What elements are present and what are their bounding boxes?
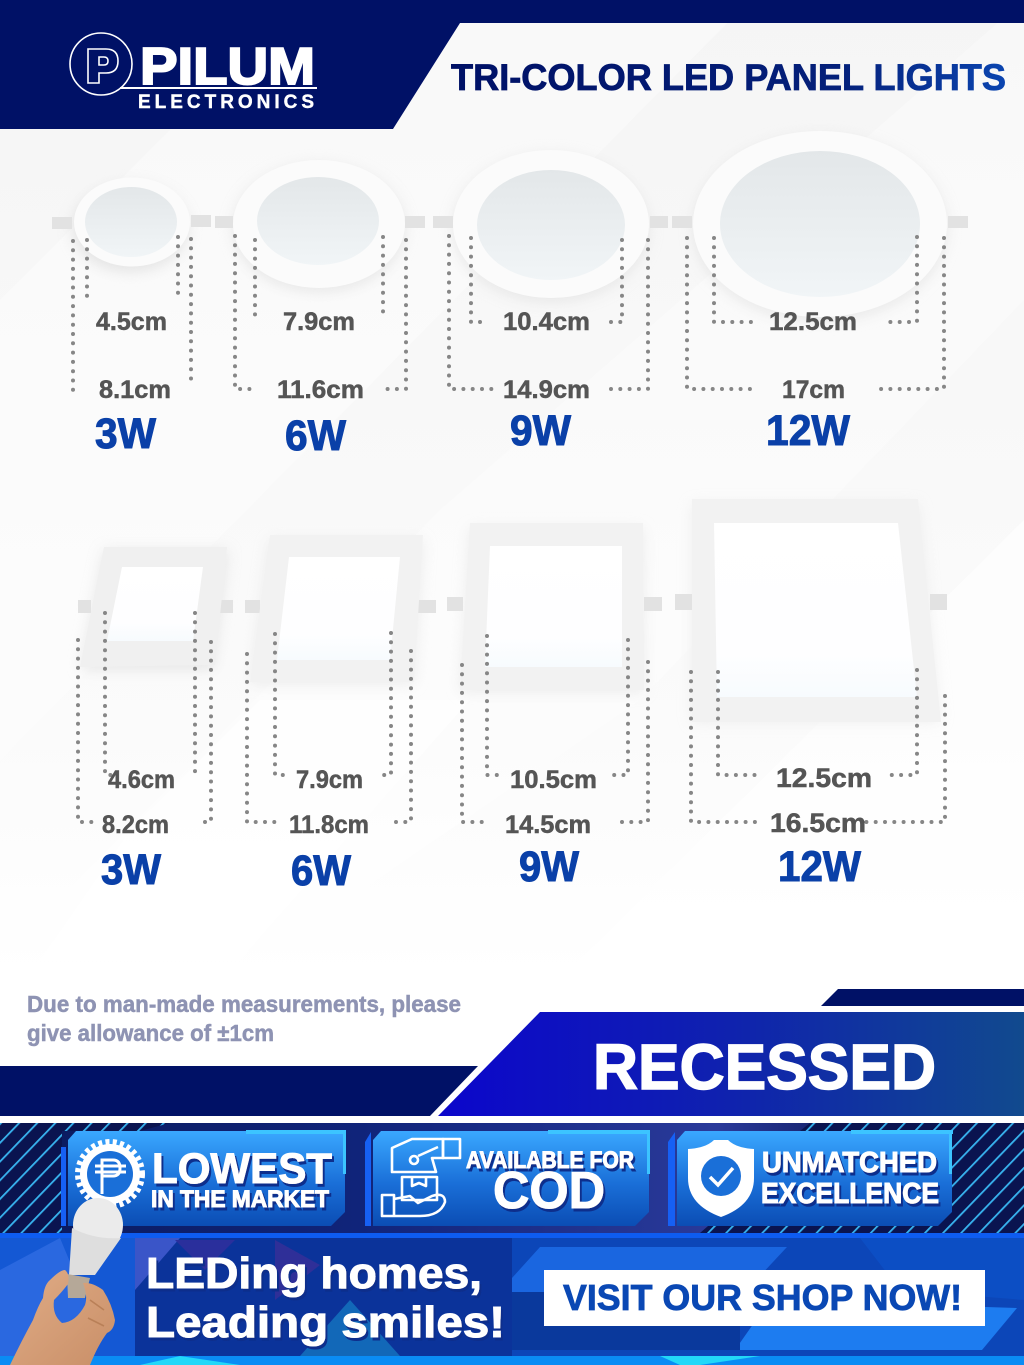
measurement disclaimer note: give allowance of ±1cm — [27, 1020, 274, 1046]
dimension labels: round lights: 4.5cm — [96, 308, 167, 336]
dimension labels: square lights: 8.2cm — [102, 811, 169, 839]
badge: lowest in the market: LOWEST — [152, 1145, 332, 1193]
dimension labels: square lights — [102, 763, 872, 839]
wattage labels: square lights: 9W — [519, 843, 579, 891]
dotted dimension guides: square lights — [78, 613, 945, 822]
slogan text — [146, 1249, 505, 1347]
call to action button: VISIT OUR SHOP NOW! — [563, 1277, 962, 1318]
panel: square recessed lights — [78, 499, 947, 722]
dimension labels: square lights: 16.5cm — [770, 808, 866, 838]
logo: Pilum Electronics: ELECTRONICS — [138, 92, 314, 113]
wattage labels: round lights: 9W — [510, 407, 571, 455]
banner: recessed — [438, 1012, 1024, 1116]
badge: unmatched excellence — [668, 1130, 953, 1226]
slogan text: LEDing homes, — [146, 1249, 482, 1298]
dimension labels: round lights: 10.4cm — [503, 308, 590, 336]
light: round 12W — [672, 131, 968, 321]
dimension labels: round lights: 17cm — [782, 376, 845, 404]
panel: round recessed lights — [52, 131, 968, 321]
measurement disclaimer note: Due to man-made measurements, please — [27, 991, 461, 1017]
logo: Pilum Electronics — [70, 33, 317, 113]
light: square 9W — [447, 523, 662, 692]
call to action button — [544, 1270, 985, 1326]
panel: benefit badges strip — [0, 1123, 1024, 1238]
dimension labels: square lights: 10.5cm — [510, 766, 597, 794]
dimension labels: round lights — [96, 308, 857, 404]
white separator — [0, 1116, 1024, 1123]
dimension labels: square lights: 11.8cm — [289, 811, 369, 839]
wattage labels: round lights — [95, 407, 850, 460]
measurement disclaimer note — [27, 991, 461, 1046]
wattage labels: round lights: 12W — [766, 407, 850, 455]
dimension labels: square lights: 12.5cm — [776, 763, 872, 793]
wattage labels: square lights — [101, 843, 861, 895]
wattage labels: square lights: 12W — [778, 843, 861, 891]
navy strip left — [0, 1066, 478, 1116]
light: square 6W — [245, 535, 436, 684]
wattage labels: round lights: 6W — [285, 412, 346, 460]
slogan text: Leading smiles! — [146, 1298, 505, 1347]
dimension labels: square lights: 7.9cm — [296, 766, 363, 794]
light: round 3W — [52, 178, 211, 272]
icon: cash on delivery hands — [382, 1139, 460, 1216]
light: round 9W — [433, 150, 668, 302]
badge: unmatched excellence: UNMATCHED — [762, 1147, 937, 1179]
title: TRI-COLOR LED PANEL LIGHTS — [451, 57, 1006, 98]
dimension labels: square lights: 14.5cm — [505, 811, 591, 839]
light: square 3W — [78, 547, 233, 670]
header band with logo — [0, 0, 1024, 129]
badge: available for cod — [365, 1130, 650, 1226]
dimension labels: round lights: 14.9cm — [503, 376, 590, 404]
dimension labels: round lights: 7.9cm — [283, 308, 355, 336]
badge: lowest in the market: IN THE MARKET — [151, 1186, 329, 1213]
dimension labels: round lights: 11.6cm — [277, 376, 364, 404]
illustration: hand holding led bulb — [10, 1198, 123, 1365]
dimension labels: round lights: 8.1cm — [99, 376, 171, 404]
panel: slogan and call to action strip — [0, 1238, 1024, 1365]
badge: available for cod: AVAILABLE FOR — [466, 1147, 634, 1174]
wattage labels: square lights: 3W — [101, 846, 161, 894]
wattage labels: square lights: 6W — [291, 847, 351, 895]
icon: peso seal — [78, 1142, 142, 1206]
badge: unmatched excellence: EXCELLENCE — [761, 1178, 939, 1210]
icon: shield check — [688, 1140, 754, 1217]
dimension labels: square lights: 4.6cm — [108, 766, 175, 794]
dotted dimension guides: round lights — [73, 236, 944, 390]
badge: available for cod: COD — [493, 1162, 605, 1220]
badge: lowest in the market — [61, 1130, 346, 1226]
light: round 6W — [215, 160, 425, 292]
navy strip top right — [821, 989, 1024, 1006]
logo: Pilum Electronics: PILUM — [140, 38, 315, 96]
dimension labels: round lights: 12.5cm — [769, 308, 857, 336]
banner: recessed: RECESSED — [593, 1031, 936, 1103]
light: square 12W — [675, 499, 947, 722]
wattage labels: round lights: 3W — [95, 410, 156, 458]
